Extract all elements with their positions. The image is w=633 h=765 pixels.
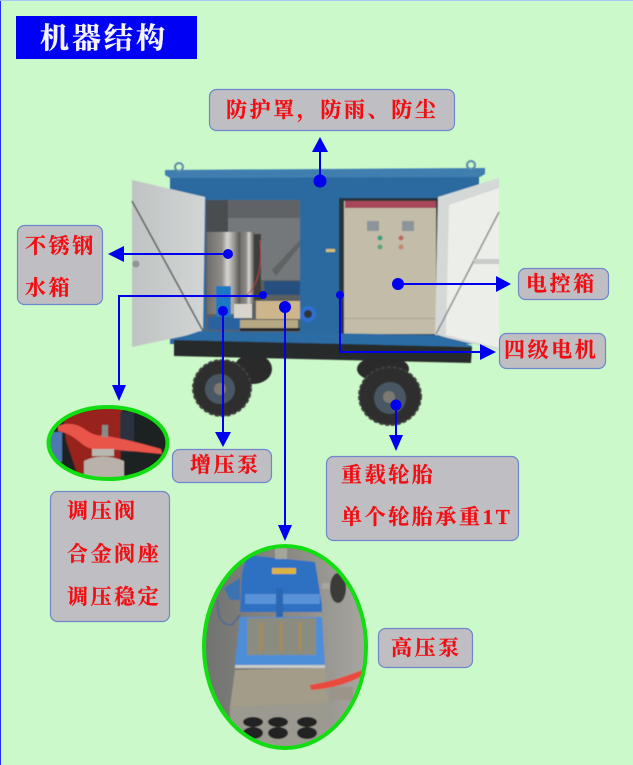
arrow: electric cabinet (392, 276, 511, 292)
housing body (165, 161, 485, 344)
callout: pressure regulating valve: 调压稳定 (67, 585, 161, 609)
callout: protective cover: 防护罩，防雨、防尘 (226, 98, 438, 123)
callout: heavy-duty tyres: 重载轮胎 (341, 463, 435, 487)
title: 机器结构 (40, 22, 168, 55)
callout: high-pressure pump (378, 628, 472, 668)
chassis (173, 331, 472, 363)
callout: stainless steel water tank (18, 226, 102, 304)
callout: booster pump (172, 450, 272, 482)
callout: stainless steel water tank: 不锈钢 (25, 234, 96, 258)
left compartment interior (206, 200, 300, 332)
title (16, 16, 197, 59)
photo: valve in green oval (48, 406, 168, 482)
arrow: high-pressure pump (278, 301, 292, 541)
arrow: tyre (389, 400, 403, 451)
callout: heavy-duty tyres: 单个轮胎承重1T (341, 505, 512, 529)
arrow: valve (112, 291, 267, 401)
photo: high-pressure pump in green oval (200, 545, 370, 750)
callout: electric control box (518, 268, 608, 300)
front wheels (193, 360, 421, 425)
arrow: booster pump (215, 306, 231, 447)
callout: pressure regulating valve: 调压阀 (67, 499, 138, 523)
wheels rear (234, 354, 409, 384)
arrow: cover (312, 137, 328, 188)
callout: pressure regulating valve: 合金阀座 (67, 542, 161, 566)
arrow: motor (336, 291, 496, 360)
callout: pressure regulating valve (50, 492, 170, 622)
callout: high-pressure pump: 高压泵 (391, 636, 462, 660)
callout: booster pump: 增压泵 (190, 453, 261, 477)
callout: four-pole motor (500, 334, 606, 368)
callout: electric control box: 电控箱 (526, 272, 597, 296)
callout: stainless steel water tank: 水箱 (25, 276, 72, 300)
callout: protective cover (210, 90, 454, 130)
electrical cabinet (339, 198, 438, 335)
callout: heavy-duty tyres (326, 456, 518, 540)
doors (132, 178, 499, 350)
callout: four-pole motor: 四级电机 (504, 338, 598, 362)
arrow: water tank (108, 246, 233, 262)
photo: trailer-mounted machine housing (132, 161, 499, 425)
